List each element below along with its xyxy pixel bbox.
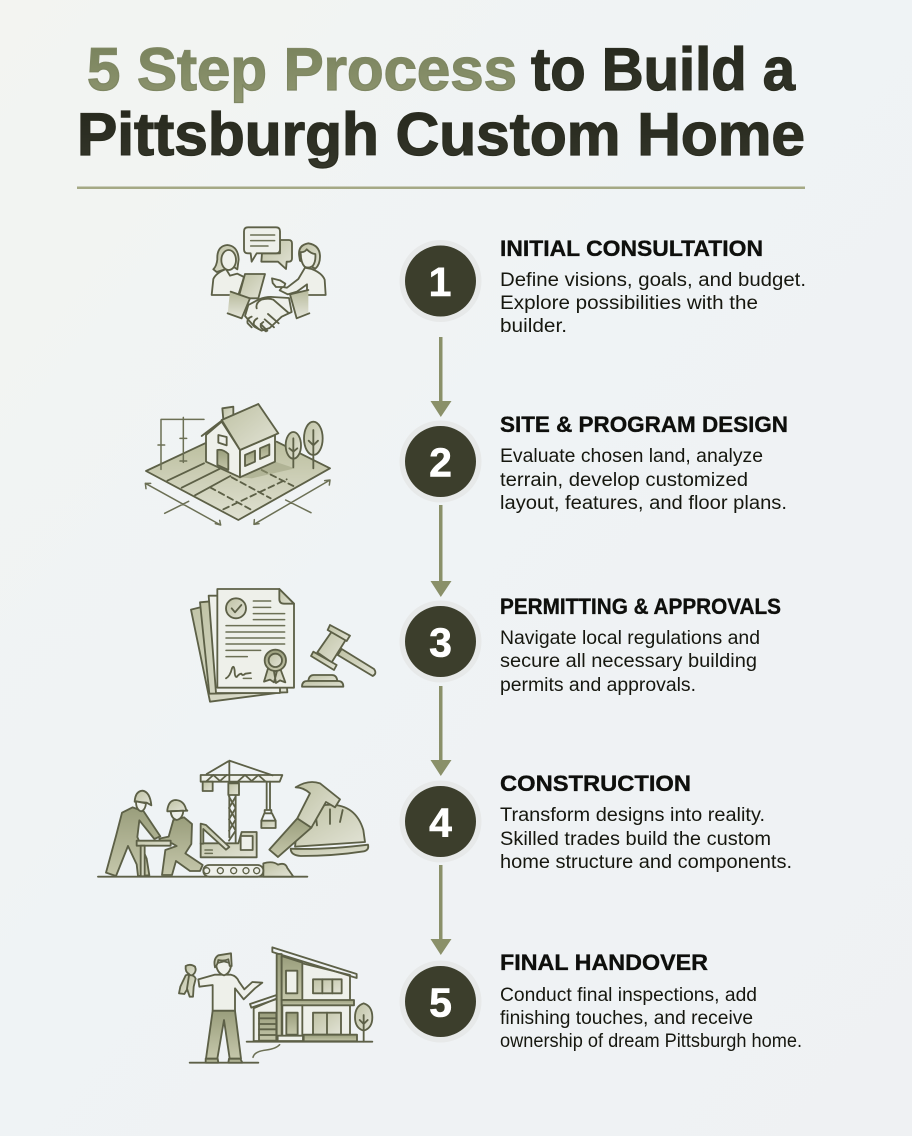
icon: construction workers crane hammer helmet (98, 761, 368, 877)
left cuff (228, 292, 250, 318)
title divider (77, 186, 805, 189)
icon: house on site plan (145, 404, 330, 525)
front document (217, 589, 294, 688)
tower crane (201, 761, 282, 843)
step 3 number badge: 3 (429, 620, 452, 666)
hammer (269, 782, 340, 857)
step 2 text block: terrain, develop customized (500, 470, 748, 491)
step 4 text block: Skilled trades build the custom (500, 829, 771, 850)
step 2 text block: Evaluate chosen land, analyze (500, 446, 763, 467)
step 3 text block: Navigate local regulations and (500, 628, 760, 649)
title line one remainder: to Build a (531, 36, 796, 103)
icon: consultation people and handshake (212, 227, 326, 331)
icon: permit documents and gavel (191, 589, 375, 702)
arrow 1 to 2 (430, 337, 452, 417)
step 5 number badge: 5 (429, 980, 452, 1026)
step 1 text block: INITIAL CONSULTATION (500, 236, 763, 261)
step 4 text block: home structure and components. (500, 852, 792, 873)
gavel base (302, 675, 343, 687)
dirt pile (263, 862, 293, 877)
ribbon rosette (264, 650, 286, 683)
worker kneeling (159, 800, 203, 875)
speech bubble back (261, 240, 292, 269)
tablet (238, 274, 265, 298)
arrow 2 to 3 (430, 505, 452, 597)
step 5 text block: finishing touches, and receive (500, 1008, 753, 1029)
step 2 number badge: 2 (429, 440, 452, 486)
step 2 number badge (400, 420, 482, 502)
step 3 text block: PERMITTING & APPROVALS (500, 594, 781, 619)
keys (186, 965, 196, 976)
house body (250, 947, 357, 1041)
step 5 text block: FINAL HANDOVER (500, 950, 708, 975)
title line two: Pittsburgh Custom Home (77, 101, 805, 168)
step 3 text block: permits and approvals. (500, 675, 696, 696)
step 2 text block: SITE & PROGRAM DESIGN (500, 412, 788, 437)
work table (137, 841, 171, 876)
woman (212, 245, 244, 295)
step 4 text block: CONSTRUCTION (500, 771, 691, 796)
ground lines (190, 1042, 372, 1063)
timeline connector arrows (430, 337, 452, 955)
step 5 text block: Conduct final inspections, add (500, 985, 757, 1006)
survey markers (158, 417, 204, 469)
step 2 text block (500, 412, 788, 514)
right cuff (290, 290, 308, 318)
step 5 text block: ownership of dream Pittsburgh home. (500, 1031, 802, 1052)
trees (286, 422, 323, 468)
step 1 text block: builder. (500, 316, 567, 337)
step 2 text block: layout, features, and floor plans. (500, 493, 787, 514)
step 4 number badge (400, 780, 482, 862)
tracks (203, 865, 263, 877)
step 3 number badge (400, 600, 482, 682)
stacked papers (191, 592, 287, 702)
step 4 number badge: 4 (429, 800, 452, 846)
step 1 number badge (400, 240, 482, 322)
man (272, 243, 326, 295)
hard hat (291, 805, 368, 856)
gavel (311, 625, 375, 676)
step 1 text block: Explore possibilities with the (500, 293, 758, 314)
arrow 3 to 4 (430, 686, 452, 776)
step 1 text block: Define visions, goals, and budget. (500, 270, 806, 291)
step 4 text block: Transform designs into reality. (500, 805, 765, 826)
step 3 text block: secure all necessary building (500, 651, 757, 672)
step 3 text block (500, 594, 781, 696)
step 1 number badge: 1 (429, 259, 451, 305)
handshake (245, 297, 292, 331)
dimension arrows (145, 480, 330, 525)
title accent text: 5 Step Process (87, 36, 517, 103)
arrow 4 to 5 (430, 865, 452, 955)
person (179, 953, 262, 1063)
path curve (253, 1045, 280, 1057)
tree (355, 1003, 372, 1042)
speech bubble front (244, 227, 280, 262)
site plot (146, 442, 330, 520)
step 5 text block (500, 950, 802, 1052)
worker standing (106, 791, 160, 876)
step 4 text block (500, 771, 792, 873)
step 1 text block (500, 236, 806, 337)
title (77, 36, 805, 168)
excavator (201, 824, 257, 857)
house (202, 404, 295, 478)
plot grid lines (167, 463, 293, 510)
icon: homeowner with keys and modern house (179, 947, 372, 1063)
step 5 number badge (400, 960, 482, 1042)
ground line (98, 874, 307, 879)
